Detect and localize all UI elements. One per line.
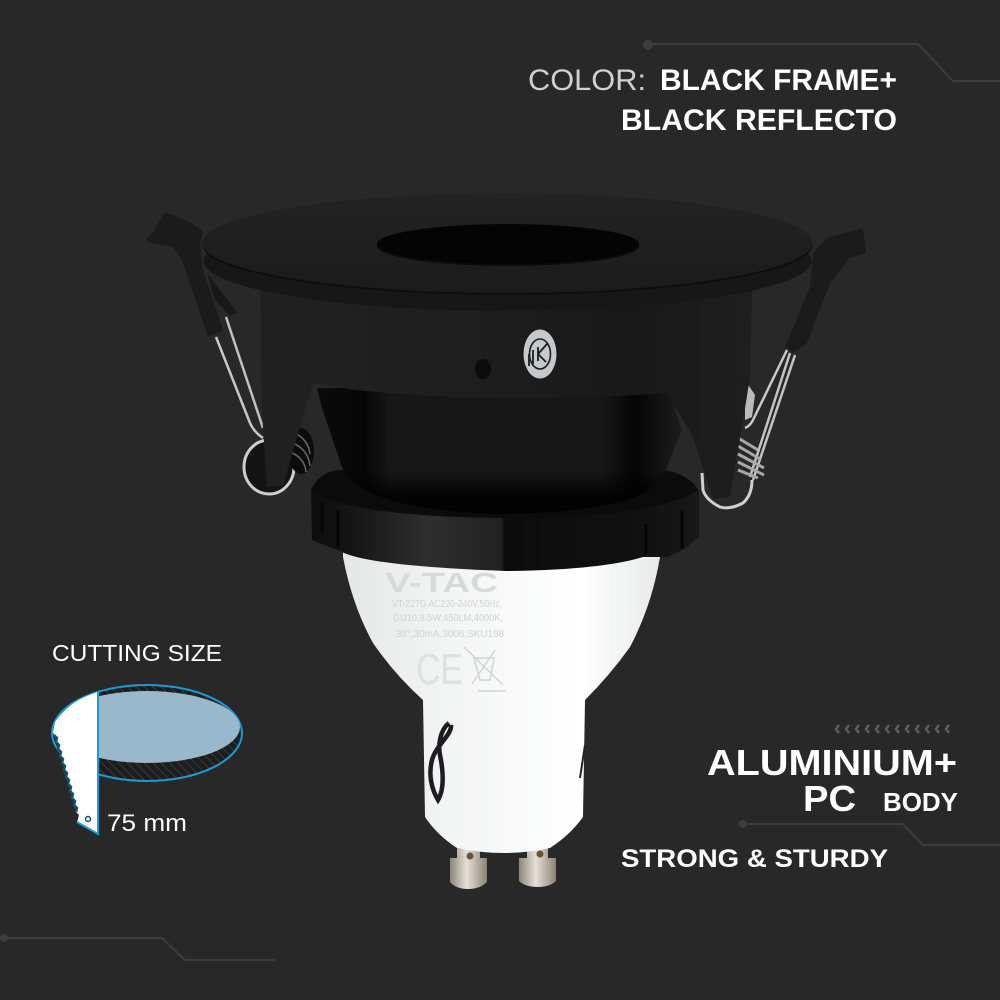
heading: colour: BLACK REFLECTO bbox=[621, 104, 897, 137]
cone bbox=[317, 388, 682, 514]
heading: material: BODY bbox=[883, 787, 958, 817]
heading: colour: BLACK FRAME+ bbox=[660, 64, 897, 97]
heading: material: PC bbox=[803, 778, 856, 819]
black wire loop bbox=[430, 723, 451, 800]
label: cutting size: CUTTING SIZE bbox=[52, 640, 222, 666]
icon: cutting size saw and hole bbox=[52, 685, 242, 834]
icon: GU10 pins bbox=[450, 840, 556, 889]
bulb body bbox=[343, 550, 660, 853]
subheading: strong and sturdy: STRONG & STURDY bbox=[621, 845, 888, 873]
circuit line: top right bbox=[643, 40, 1000, 81]
bulb label text: VT-227D,AC220-240V,50Hz, bbox=[392, 598, 502, 610]
bulb label text bbox=[385, 567, 504, 694]
wire at right bbox=[580, 745, 585, 778]
left spring clip bbox=[147, 212, 314, 494]
icon: earth mark badge bbox=[524, 330, 556, 378]
heading: colour bbox=[528, 64, 897, 137]
chevron row bbox=[836, 725, 949, 733]
bulb label text: 38°,30mA,3006,SKU198 bbox=[396, 628, 504, 640]
bulb label text: GU10,8.5W,450LM,4000K, bbox=[393, 612, 503, 624]
icon: recycling bin mark bbox=[464, 647, 506, 691]
heading: material: ALUMINIUM+ bbox=[707, 742, 957, 783]
flange bbox=[202, 193, 812, 311]
heading: colour: COLOR: bbox=[528, 64, 646, 97]
heading: material bbox=[707, 742, 958, 819]
label: 75 mm: 75 mm bbox=[107, 810, 187, 837]
bulb label text: V-TAC bbox=[385, 567, 498, 598]
housing with legs bbox=[260, 290, 752, 499]
circuit line: bottom left bbox=[0, 934, 275, 960]
product: recessed downlight with GU10 bulb bbox=[147, 193, 866, 889]
small screw hole bbox=[475, 359, 491, 379]
bulb label text: CE bbox=[416, 645, 463, 694]
circuit line: lower right bbox=[739, 820, 1000, 845]
collar bbox=[311, 470, 699, 571]
right spring clip bbox=[702, 228, 866, 508]
